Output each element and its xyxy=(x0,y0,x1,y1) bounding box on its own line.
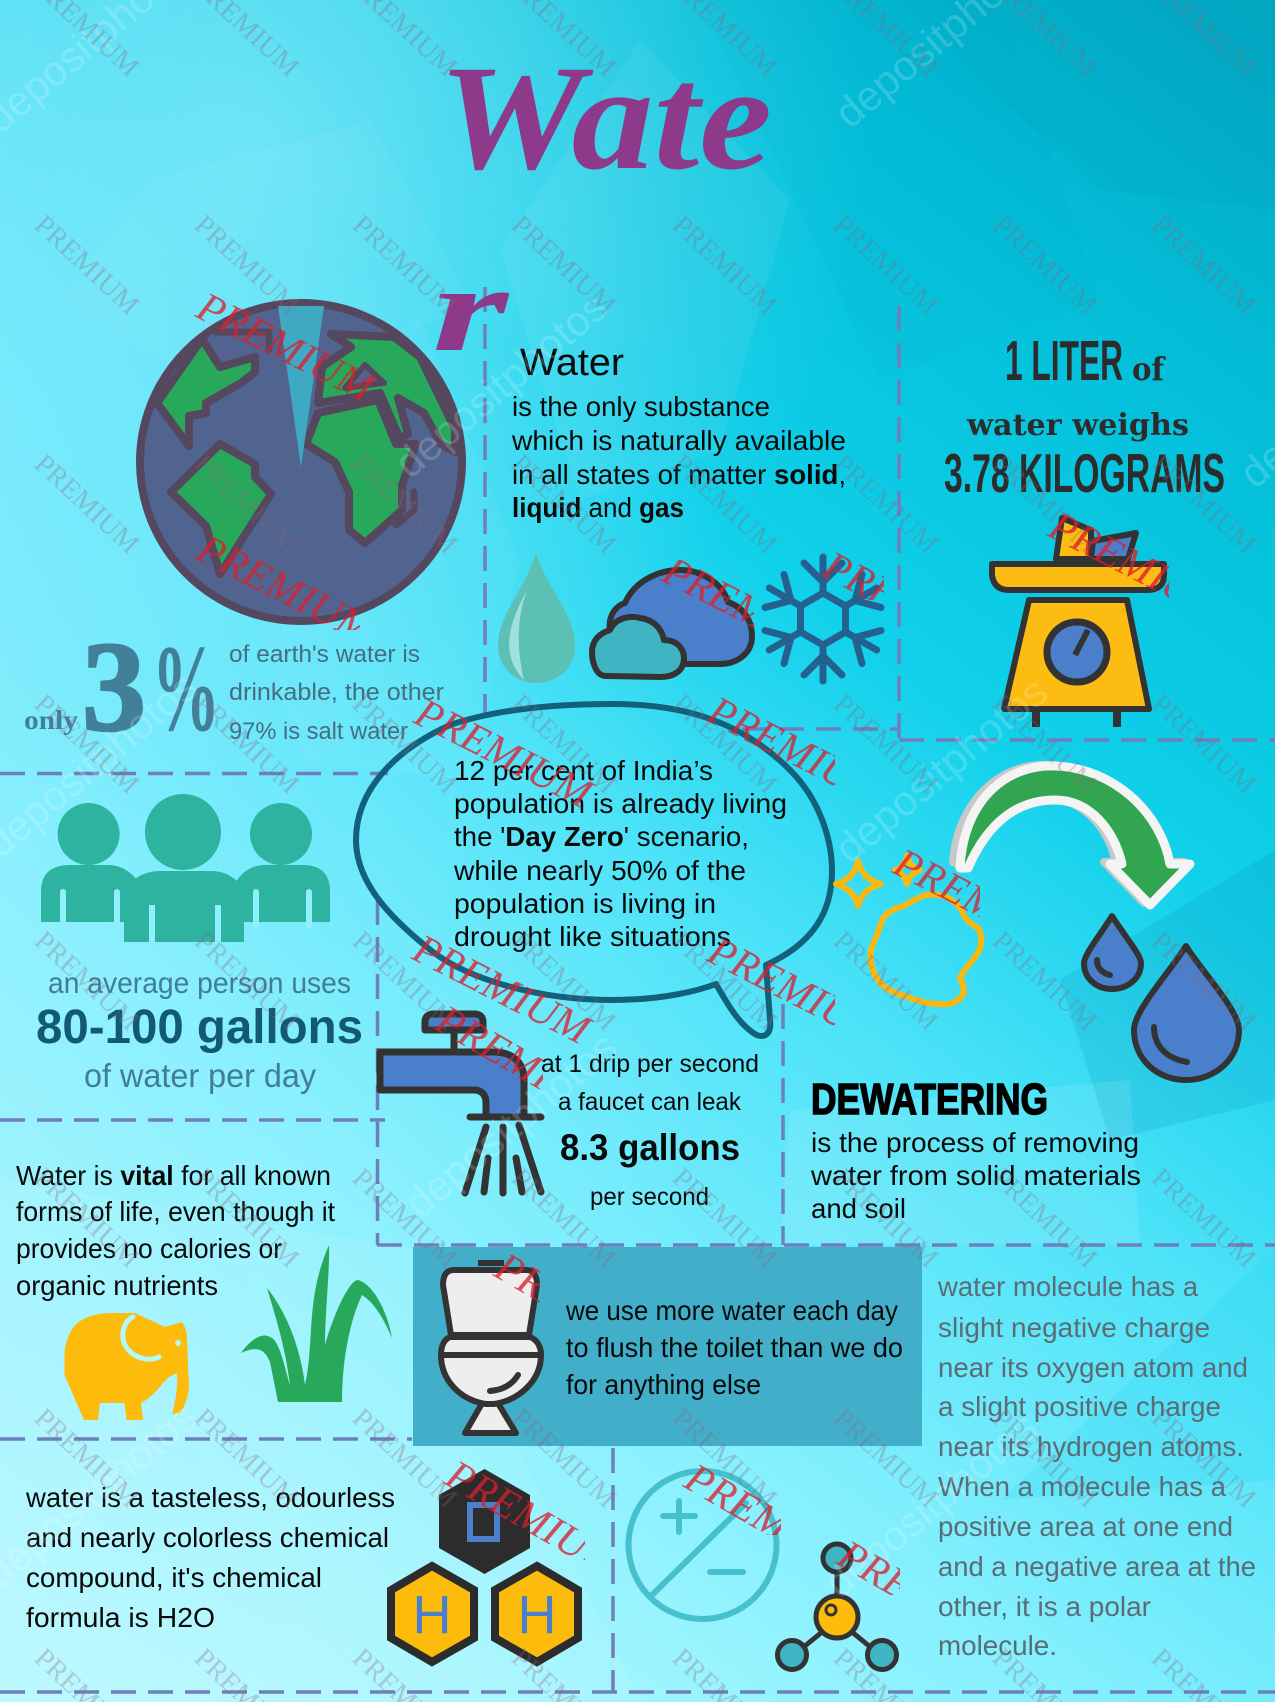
text: drinkable water xyxy=(229,641,444,745)
watermark: grey PREMIUM grid: PREMIUM xyxy=(986,925,1103,1037)
panel: people water use xyxy=(36,794,363,1094)
watermark: depositphotos: depositphotos xyxy=(386,283,616,487)
text: water is vital: provides no calories or xyxy=(16,1233,282,1264)
watermark: red PREMIUM stamps: PREMIUM xyxy=(655,547,849,677)
watermark: grey PREMIUM grid: PREMIUM xyxy=(666,448,783,560)
watermark: grey PREMIUM grid: PREMIUM xyxy=(505,1162,622,1274)
watermark: grey PREMIUM grid: PREMIUM xyxy=(1145,1402,1262,1514)
text: polar molecule explanation: a slight positive charge xyxy=(938,1391,1221,1422)
watermark: grey PREMIUM grid: PREMIUM xyxy=(1145,448,1262,560)
heading: 1 liter of water weighs 3.78 kilograms: water weighs xyxy=(966,408,1189,443)
icon: liquid drop xyxy=(498,553,575,683)
watermark: red PREMIUM stamps: PREMIUM xyxy=(815,542,1009,672)
watermark: grey PREMIUM grid: PREMIUM xyxy=(986,209,1103,321)
watermark: grey PREMIUM grid: PREMIUM xyxy=(666,925,783,1037)
heading: dewatering: DEWATERING xyxy=(811,1075,1048,1124)
text: average person usage: of water per day xyxy=(84,1057,316,1094)
watermark: grey PREMIUM grid: PREMIUM xyxy=(986,448,1103,560)
watermark: grey PREMIUM grid: PREMIUM xyxy=(827,209,944,321)
text: dewatering definition: water from solid materials xyxy=(810,1160,1141,1191)
text: average person usage: 80-100 gallons xyxy=(36,1001,363,1054)
watermark: grey PREMIUM grid: PREMIUM xyxy=(666,1402,783,1514)
panel: states of matter xyxy=(498,342,886,683)
text: polar molecule explanation: water molecule has a xyxy=(937,1271,1198,1302)
watermark: grey PREMIUM grid: PREMIUM xyxy=(666,1162,783,1274)
text: H2O description: formula is H2O xyxy=(26,1602,215,1633)
watermark: red PREMIUM stamps: PREMIUM xyxy=(886,839,1080,969)
big statistic: only 3%: only xyxy=(24,705,79,735)
watermark: grey PREMIUM grid: PREMIUM xyxy=(827,1162,944,1274)
text: dewatering definition: and soil xyxy=(811,1193,906,1224)
text: water is vital xyxy=(16,1160,335,1301)
watermark: grey PREMIUM grid: PREMIUM xyxy=(188,925,305,1037)
text: states of matter: which is naturally available xyxy=(511,425,846,456)
panel: chemical formula xyxy=(25,1469,578,1662)
icon: plus minus circle xyxy=(628,1471,776,1619)
text: faucet leak: a faucet can leak xyxy=(558,1088,741,1116)
text: polar molecule explanation: molecule. xyxy=(938,1630,1057,1661)
watermark: grey PREMIUM grid: PREMIUM xyxy=(28,688,145,800)
title xyxy=(432,35,772,377)
icon: toilet xyxy=(441,1260,541,1433)
callout: Day Zero speech bubble: drought like situations xyxy=(454,921,731,952)
watermark: red PREMIUM stamps: PREMIUM xyxy=(676,1454,867,1591)
panel: weight of a liter xyxy=(944,329,1225,727)
arrow: curved green arrow xyxy=(953,765,1190,905)
watermark: grey PREMIUM grid: PREMIUM xyxy=(346,209,463,321)
watermark: grey PREMIUM grid: PREMIUM xyxy=(986,688,1103,800)
text: states of matter: in all states of matter solid, xyxy=(512,459,846,490)
text: states of matter: liquid and gas xyxy=(512,492,684,523)
watermark: red PREMIUM stamps xyxy=(194,294,1169,1595)
text: water is vital: forms of life, even though it xyxy=(16,1196,335,1227)
watermark: grey PREMIUM grid: PREMIUM xyxy=(28,209,145,321)
text: faucet leak: at 1 drip per second xyxy=(541,1050,759,1078)
text: polar molecule explanation xyxy=(937,1271,1256,1661)
panel: toilet water use xyxy=(413,1247,922,1446)
watermark: grey PREMIUM grid: PREMIUM xyxy=(666,209,783,321)
text: states of matter xyxy=(511,391,846,523)
icon: cloud xyxy=(592,570,752,677)
watermark: depositphotos: depositphotos xyxy=(816,1403,1046,1607)
watermark: grey PREMIUM grid: PREMIUM xyxy=(505,209,622,321)
watermark: red PREMIUM stamps: PREMIUM xyxy=(829,1531,1020,1668)
text: H2O description: compound, it's chemical xyxy=(26,1562,322,1593)
panel: vital for life xyxy=(16,1160,392,1420)
text: polar molecule explanation: positive area at one end xyxy=(938,1511,1233,1542)
callout: Day Zero speech bubble: the 'Day Zero' scenario, xyxy=(454,821,749,852)
watermark: grey PREMIUM grid: PREMIUM xyxy=(188,1162,305,1274)
icon: three people xyxy=(41,794,330,945)
callout: Day Zero speech bubble: population is already living xyxy=(454,788,787,819)
text: polar molecule explanation: and a negative area at the xyxy=(938,1551,1256,1582)
watermark: grey PREMIUM grid: PREMIUM xyxy=(986,1402,1103,1514)
callout: Day Zero speech bubble xyxy=(356,704,832,1036)
watermark: grey PREMIUM grid: PREMIUM xyxy=(827,448,944,560)
watermark: grey PREMIUM grid: PREMIUM xyxy=(505,925,622,1037)
watermark: grey PREMIUM grid: PREMIUM xyxy=(505,688,622,800)
text: states of matter: is the only substance xyxy=(512,391,770,422)
watermark: grey PREMIUM grid: PREMIUM xyxy=(28,448,145,560)
watermark: red PREMIUM stamps: PREMIUM xyxy=(437,1451,628,1588)
text: dewatering definition xyxy=(810,1127,1141,1224)
watermark: grey PREMIUM grid: PREMIUM xyxy=(505,1402,622,1514)
icon: H2O hexagons: H xyxy=(412,1585,452,1645)
callout: Day Zero speech bubble: 12 per cent of India’s xyxy=(454,755,713,786)
watermark: grey PREMIUM grid: PREMIUM xyxy=(346,1162,463,1274)
text: toilet flush fact: to flush the toilet than we do xyxy=(566,1332,903,1363)
watermark: grey PREMIUM grid: PREMIUM xyxy=(1145,209,1262,321)
watermark: grey PREMIUM grid: PREMIUM xyxy=(827,1402,944,1514)
callout: Day Zero speech bubble: population is living in xyxy=(454,888,716,919)
watermark: grey PREMIUM grid: PREMIUM xyxy=(188,448,305,560)
text: faucet leak xyxy=(541,1050,759,1211)
text: average person usage: an average person uses xyxy=(48,967,351,1000)
watermark: red PREMIUM stamps: PREMIUM xyxy=(486,1243,677,1380)
watermark: grey PREMIUM grid: PREMIUM xyxy=(1145,925,1262,1037)
text: polar molecule explanation: other, it is a polar xyxy=(938,1591,1151,1622)
heading: 1 liter of water weighs 3.78 kilograms: 1 LITER xyxy=(1005,329,1123,393)
text: water is vital: Water is vital for all known xyxy=(16,1160,331,1191)
watermark: grey PREMIUM grid: PREMIUM xyxy=(827,688,944,800)
icon: H2O hexagons: H xyxy=(518,1585,556,1645)
watermark: grey PREMIUM grid: PREMIUM xyxy=(346,1402,463,1514)
title: Wate xyxy=(438,35,772,201)
watermark: grey PREMIUM grid: PREMIUM xyxy=(827,925,944,1037)
watermark: grey PREMIUM grid: PREMIUM xyxy=(28,1402,145,1514)
watermark: grey PREMIUM grid: PREMIUM xyxy=(346,448,463,560)
icon: H2O hexagons xyxy=(391,1469,578,1662)
watermark: grey PREMIUM grid: PREMIUM xyxy=(1145,1162,1262,1274)
text: drinkable water: drinkable, the other xyxy=(229,679,444,706)
watermark: grey PREMIUM grid: PREMIUM xyxy=(1145,688,1262,800)
text: H2O description: and nearly colorless chemical xyxy=(26,1522,389,1553)
heading: 1 liter of water weighs 3.78 kilograms: of xyxy=(1132,350,1166,388)
icon: water molecule xyxy=(778,1544,896,1670)
watermark: grey PREMIUM grid: PREMIUM xyxy=(986,1162,1103,1274)
text: average person usage xyxy=(36,967,363,1094)
icon: grass xyxy=(241,1245,392,1402)
watermark: grey PREMIUM grid: PREMIUM xyxy=(346,925,463,1037)
panel: polarity xyxy=(628,1271,1256,1670)
big statistic: only 3% xyxy=(24,616,220,758)
title: r xyxy=(432,242,510,377)
text: toilet flush fact: we use more water each day xyxy=(565,1295,898,1326)
watermark: red PREMIUM stamps: PREMIUM xyxy=(407,689,601,819)
watermark: red PREMIUM stamps: PREMIUM xyxy=(427,996,618,1133)
text: polar molecule explanation: near its oxygen atom and xyxy=(938,1352,1248,1383)
callout: Day Zero speech bubble: while nearly 50% of the xyxy=(453,855,746,886)
icon: soil outline with sparkles xyxy=(836,856,981,1004)
text: dewatering definition: is the process of removing xyxy=(811,1127,1139,1158)
heading: 1 liter of water weighs 3.78 kilograms xyxy=(944,329,1225,504)
watermark: grey PREMIUM grid: PREMIUM xyxy=(28,925,145,1037)
text: water is vital: organic nutrients xyxy=(16,1270,218,1301)
watermark: red PREMIUM stamps: PREMIUM xyxy=(189,525,383,655)
panel: earth and drinkable water xyxy=(24,303,462,758)
watermark: depositphotos: depositphotos xyxy=(826,668,1056,872)
watermark: grey PREMIUM grid: PREMIUM xyxy=(28,1162,145,1274)
panel: leaking faucet xyxy=(380,1014,759,1211)
text: faucet leak: 8.3 gallons xyxy=(560,1127,740,1168)
big statistic: only 3%: % xyxy=(152,620,220,757)
watermark: grey PREMIUM grid: PREMIUM xyxy=(188,1402,305,1514)
text: toilet flush fact: for anything else xyxy=(566,1369,761,1400)
icon: globe with wedge xyxy=(140,303,462,621)
icon: faucet xyxy=(380,1014,541,1193)
text: polar molecule explanation: near its hydrogen atoms. xyxy=(938,1431,1244,1462)
panel: dewatering xyxy=(810,765,1239,1224)
icon: elephant xyxy=(64,1313,189,1420)
watermark: grey PREMIUM grid: PREMIUM xyxy=(346,688,463,800)
text: drinkable water: of earth's water is xyxy=(229,641,420,668)
text: H2O description: water is a tasteless, odourless xyxy=(25,1482,395,1513)
watermark: red PREMIUM stamps: PREMIUM xyxy=(700,687,894,817)
text: toilet flush fact xyxy=(565,1295,903,1400)
text: polar molecule explanation: slight negative charge xyxy=(938,1312,1210,1343)
watermark: grey PREMIUM grid: PREMIUM xyxy=(188,688,305,800)
icon: water drops xyxy=(1084,916,1239,1080)
text: polar molecule explanation: When a molecule has a xyxy=(938,1471,1226,1502)
big statistic: only 3%: 3 xyxy=(82,616,146,758)
watermark: red PREMIUM stamps: PREMIUM xyxy=(189,283,383,413)
watermark: grey PREMIUM grid: PREMIUM xyxy=(505,448,622,560)
watermark: red PREMIUM stamps: PREMIUM xyxy=(1041,502,1235,632)
text: faucet leak: per second xyxy=(590,1183,709,1211)
watermark: red PREMIUM stamps: PREMIUM xyxy=(405,925,599,1055)
heading: Water: Water xyxy=(520,342,624,384)
watermark: grey PREMIUM grid: PREMIUM xyxy=(188,209,305,321)
watermark: grey PREMIUM grid: PREMIUM xyxy=(666,688,783,800)
icon: kitchen scale xyxy=(992,518,1164,727)
text: H2O description xyxy=(25,1482,395,1633)
watermark: depositphotos: depositphotos xyxy=(396,1023,626,1227)
text: drinkable water: 97% is salt water xyxy=(229,718,408,745)
watermark: red PREMIUM stamps: PREMIUM xyxy=(700,927,894,1057)
icon: snowflake xyxy=(760,557,886,681)
